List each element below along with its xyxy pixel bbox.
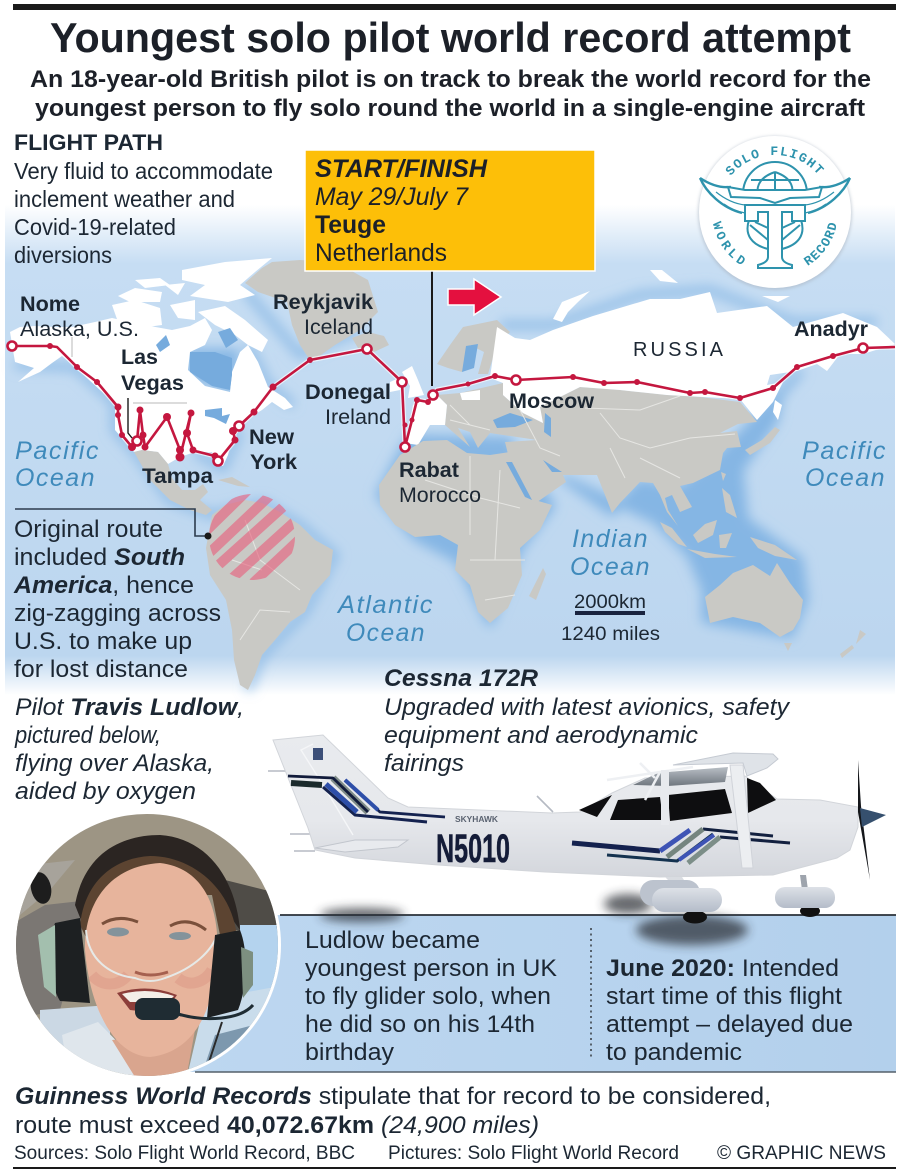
Greenland — [245, 260, 378, 362]
ocean labels: Pacific — [15, 437, 100, 465]
map labels: Morocco — [399, 483, 481, 507]
South America — [206, 500, 333, 690]
upper wing — [673, 753, 778, 776]
pilot caption: flying over Alaska, — [15, 750, 214, 777]
flight path note: Very fluid to accommodate — [14, 158, 273, 184]
Mexico and Central America — [134, 450, 212, 515]
guinness note: route must exceed 40,072.67km (24,900 miles) — [15, 1112, 539, 1139]
tail stabiliser — [315, 840, 408, 852]
spinner — [860, 808, 886, 827]
map labels: Tampa — [142, 464, 214, 488]
windscreen struts — [607, 763, 693, 800]
Asian islands — [660, 427, 797, 560]
ocean labels: Pacific — [802, 437, 887, 465]
pilot caption — [14, 694, 244, 805]
June 2020 fact: June 2020: Intended — [606, 955, 839, 982]
start finish box — [305, 150, 595, 271]
U.S. border — [72, 337, 187, 403]
glider fact: to fly glider solo, when — [305, 983, 551, 1010]
logo: solo flight world record: RECORD — [804, 223, 836, 266]
fuselage and tail — [273, 735, 858, 877]
glider fact: he did so on his 14th — [305, 1011, 535, 1038]
top rule — [13, 4, 896, 10]
panel: facts — [190, 915, 896, 1072]
aircraft caption: Upgraded with latest avionics, safety — [384, 694, 791, 721]
glider fact: Ludlow became — [305, 927, 480, 954]
south america note: for lost distance — [14, 656, 188, 683]
ground shadows — [320, 894, 748, 945]
subtitle: An 18-year-old British pilot is on track to break the world record for the — [30, 66, 871, 93]
coastal shading — [15, 290, 877, 690]
sources: © GRAPHIC NEWS — [717, 1143, 886, 1164]
ocean labels: Atlantic — [336, 591, 434, 619]
Cuba — [218, 477, 250, 487]
sources — [14, 1143, 886, 1164]
south america note: included South — [14, 544, 185, 571]
flight path heading: FLIGHT PATH — [14, 130, 163, 155]
photo: Travis Ludlow — [10, 810, 290, 1085]
New Zealand and Tasmania — [784, 630, 866, 658]
Belarus patch — [460, 390, 480, 400]
ocean labels: Ocean — [570, 553, 651, 581]
land — [10, 258, 895, 690]
flight path note: inclement weather and — [14, 186, 235, 212]
ocean labels: Ocean — [346, 619, 426, 647]
June 2020 fact — [606, 955, 853, 1066]
route ring markers — [8, 342, 868, 466]
map — [5, 205, 895, 695]
map labels: Donegal — [305, 380, 391, 404]
start finish pointer line — [431, 270, 433, 386]
pilot caption: aided by oxygen — [15, 778, 196, 805]
logo: solo flight world record — [696, 134, 854, 291]
sources: Pictures: Solo Flight World Record — [388, 1143, 679, 1164]
start finish box: Teuge — [315, 211, 386, 239]
glider fact: youngest person in UK — [305, 955, 557, 982]
June 2020 fact: to pandemic — [606, 1039, 742, 1066]
map labels: New — [249, 425, 294, 449]
Hudson Bay and lakes — [156, 328, 238, 424]
ocean labels: Ocean — [805, 464, 886, 492]
map labels: Alaska, U.S. — [20, 317, 139, 341]
map labels: Las — [121, 345, 158, 369]
South America hatched area — [209, 494, 295, 580]
propeller — [858, 760, 870, 880]
wing strut — [730, 765, 753, 868]
ground line — [280, 914, 896, 916]
inland seas — [462, 344, 562, 500]
guinness note: Guinness World Records stipulate that for record to be considered, — [15, 1083, 771, 1110]
subtitle: youngest person to fly solo round the world in a single-engine aircraft — [35, 95, 865, 122]
ocean labels: Indian — [572, 525, 649, 553]
Scandinavia — [437, 320, 510, 374]
flight path note: diversions — [14, 242, 112, 268]
Madagascar — [529, 568, 546, 600]
map labels: Vegas — [121, 371, 184, 395]
south america callout leader — [15, 509, 212, 540]
tail badge — [313, 748, 323, 760]
aircraft caption — [384, 665, 791, 777]
aircraft — [268, 735, 896, 945]
aircraft caption: Cessna 172R — [384, 665, 539, 692]
main gear — [640, 877, 722, 924]
map labels: Iceland — [304, 315, 373, 339]
June 2020 fact: start time of this flight — [606, 983, 842, 1010]
route stop points — [47, 343, 836, 462]
ocean labels — [15, 437, 887, 647]
south america note: zig-zagging across — [14, 600, 221, 627]
guinness note — [15, 1083, 771, 1139]
Arctic Russian islands — [553, 270, 790, 420]
rudder line — [301, 744, 353, 835]
start finish box: Netherlands — [315, 239, 447, 267]
France and Spain — [405, 395, 447, 445]
map labels: Nome — [20, 292, 80, 316]
map labels: Rabat — [399, 458, 459, 482]
las vegas pointer — [128, 398, 132, 438]
cabin post — [661, 770, 669, 825]
south america note: Original route — [14, 516, 163, 543]
tail livery — [288, 776, 445, 822]
ocean background — [5, 205, 895, 695]
scale bar: 1240 miles — [561, 624, 660, 645]
aircraft caption: fairings — [384, 750, 464, 777]
subtitle — [30, 66, 871, 122]
Australia — [705, 563, 803, 637]
map labels: York — [250, 450, 297, 474]
windows — [579, 778, 776, 821]
title: Youngest solo pilot world record attempt — [50, 14, 851, 61]
flight route — [8, 342, 895, 466]
south america note: America, hence — [13, 572, 194, 599]
Eurasia — [437, 383, 757, 526]
logo: solo flight world record: WORLD — [713, 220, 745, 264]
scale bar: 2000km — [574, 592, 646, 613]
map labels: Moscow — [509, 389, 594, 413]
registration: N5010 — [436, 827, 510, 871]
map labels: Anadyr — [794, 317, 869, 341]
model text: SKYHAWK — [455, 815, 498, 824]
sources: Sources: Solo Flight World Record, BBC — [14, 1143, 355, 1164]
Russia — [490, 292, 895, 423]
Africa — [379, 440, 552, 623]
glider fact — [305, 927, 557, 1066]
nose gear — [775, 875, 835, 917]
Iceland — [352, 332, 389, 353]
start finish box: START/FINISH — [315, 155, 488, 183]
borders — [232, 396, 735, 640]
pilot caption: pictured below, — [14, 722, 161, 749]
UK and Ireland — [390, 366, 424, 398]
bottom rule — [13, 1167, 896, 1169]
aircraft caption: equipment and aerodynamic — [384, 722, 698, 749]
scale bar — [561, 592, 660, 645]
flight path note — [14, 158, 273, 268]
fuselage livery — [572, 829, 790, 863]
map labels: Ireland — [325, 405, 391, 429]
logo: solo flight world record: SOLO FLIGHT — [726, 146, 824, 175]
ocean labels: Ocean — [15, 464, 96, 492]
antennas — [268, 771, 553, 851]
Canada and U.S. — [10, 318, 293, 466]
south america note: U.S. to make up — [14, 628, 192, 655]
map labels: RUSSIA — [633, 339, 724, 361]
flight path note: Covid-19-related — [14, 214, 176, 240]
glider fact: birthday — [305, 1039, 394, 1066]
arrow: direction of flight — [448, 279, 501, 315]
Arctic islands — [112, 258, 272, 352]
map labels — [20, 290, 869, 507]
June 2020 fact: attempt – delayed due — [606, 1011, 853, 1038]
south america note — [13, 516, 221, 683]
map labels: Reykjavik — [273, 290, 373, 314]
skylight — [633, 767, 728, 786]
pilot caption: Pilot Travis Ludlow, — [15, 694, 244, 721]
start finish box: May 29/July 7 — [315, 183, 469, 211]
